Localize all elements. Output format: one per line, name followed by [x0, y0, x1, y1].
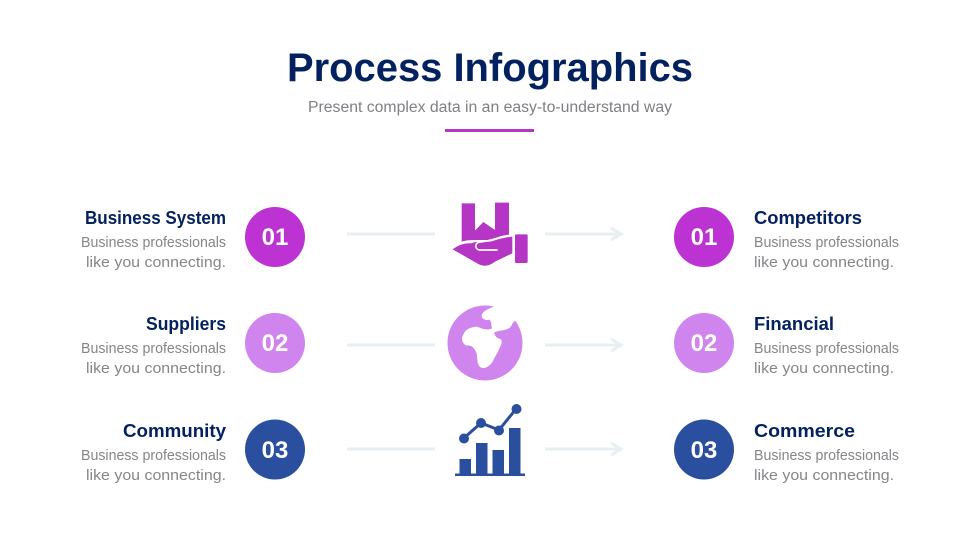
- right item 2: Financial: [754, 313, 899, 377]
- right item 2: Financial: like you connecting.: [754, 360, 894, 377]
- right badge 01: 01: [691, 224, 717, 251]
- left item 3: Community: Community: [123, 420, 227, 441]
- right item 3: Commerce: Business professionals: [754, 447, 899, 464]
- right item 3: Commerce: [754, 420, 899, 484]
- icon: globe showing Africa: [448, 302, 522, 380]
- right badge 02: 02: [691, 330, 717, 357]
- right badge 02: [674, 313, 734, 373]
- right badge 03: 03: [691, 437, 717, 464]
- right item 2: Financial: Business professionals: [754, 340, 899, 357]
- right item 3: Commerce: like you connecting.: [754, 467, 894, 484]
- left badge 01: [245, 207, 305, 267]
- left item 3: Community: [81, 420, 227, 484]
- right badge 01: [674, 207, 734, 267]
- right item 1: Competitors: like you connecting.: [754, 254, 894, 271]
- left item 2: Suppliers: like you connecting.: [86, 360, 226, 377]
- right item 2: Financial: Financial: [754, 313, 834, 334]
- icon: bar chart with trend line: [455, 404, 525, 476]
- left item 2: Suppliers: Business professionals: [81, 340, 226, 357]
- left item 3: Community: Business professionals: [81, 447, 226, 464]
- left item 2: Suppliers: [81, 313, 226, 377]
- arrow 2 right: [545, 339, 621, 351]
- right item 1: Competitors: Business professionals: [754, 234, 899, 251]
- heading: Business System: [85, 207, 226, 228]
- description: [81, 234, 226, 271]
- left badge 02: [245, 313, 305, 373]
- connector line 3 left: [347, 448, 435, 450]
- icon: box on open hand: [453, 203, 528, 266]
- title: Process Infographics: [287, 46, 693, 90]
- connector line 2 left: [347, 344, 435, 346]
- right item 1: Competitors: [754, 207, 899, 271]
- right badge 03: [674, 420, 734, 480]
- left badge 03: 03: [262, 437, 288, 464]
- arrow 3 right: [545, 443, 621, 455]
- left badge 01: 01: [262, 224, 288, 251]
- left badge 02: 02: [262, 330, 288, 357]
- description: Business professionals: [81, 234, 226, 251]
- subtitle: Present complex data in an easy-to-understand way: [308, 99, 672, 116]
- right item 1: Competitors: Competitors: [754, 207, 862, 228]
- arrow 1 right: [545, 228, 621, 240]
- title underline: [445, 129, 534, 132]
- right item 3: Commerce: Commerce: [754, 420, 855, 441]
- description: like you connecting.: [86, 254, 226, 271]
- left badge 03: [245, 420, 305, 480]
- connector line 1 left: [347, 232, 435, 236]
- left item 2: Suppliers: Suppliers: [146, 313, 226, 334]
- left item 3: Community: like you connecting.: [86, 467, 226, 484]
- left item 1: Business System: [81, 207, 226, 271]
